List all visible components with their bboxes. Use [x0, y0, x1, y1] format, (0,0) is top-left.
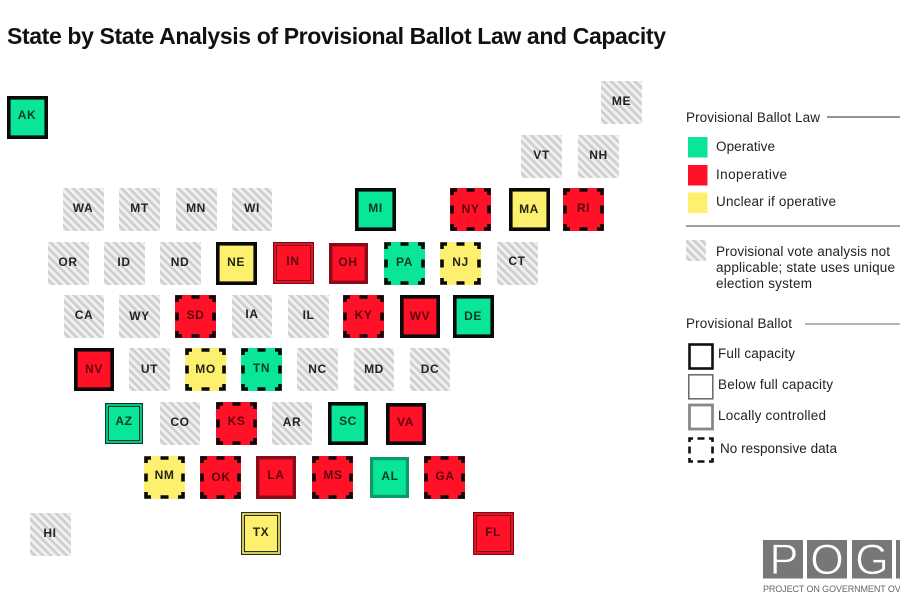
- legend: provisional ballot capacity: [686, 316, 900, 462]
- tile: SD: [175, 295, 216, 338]
- title: State by State Analysis of Provisional Ballot Law and Capacity: [7, 23, 666, 49]
- tile: CO: [160, 402, 200, 445]
- tile: OR: OR: [58, 255, 78, 269]
- tile: WI: WI: [244, 201, 260, 215]
- tile: PA: [384, 242, 425, 285]
- tile: HI: [30, 513, 71, 556]
- tile: ME: ME: [612, 94, 631, 108]
- tile: MS: MS: [323, 468, 343, 482]
- tile: OR: [48, 242, 89, 285]
- tile: PA: PA: [396, 255, 413, 269]
- tile: MD: MD: [364, 362, 384, 376]
- legend item: locally controlled: [690, 405, 826, 429]
- tile: IA: [232, 295, 272, 338]
- tile: WY: WY: [129, 309, 150, 323]
- legend item: locally controlled: Locally controlled: [718, 408, 826, 423]
- logo: POGO: P: [770, 536, 798, 584]
- tile: VT: [521, 135, 562, 178]
- tile: VA: [386, 403, 426, 445]
- legend item: not applicable: election system: [716, 276, 812, 291]
- legend item: not applicable: applicable; state uses unique: [716, 260, 895, 275]
- tile: NH: NH: [589, 148, 608, 162]
- tile: NJ: [440, 242, 481, 285]
- legend item: unclear: [688, 192, 836, 213]
- tile: AR: AR: [283, 415, 301, 429]
- tile: MA: [509, 188, 550, 231]
- tile: FL: FL: [485, 525, 501, 539]
- tile: NH: [578, 135, 619, 178]
- tile: MS: [312, 456, 353, 499]
- tile: CT: [497, 242, 538, 285]
- tile: NE: [216, 242, 257, 285]
- tile: VA: VA: [397, 415, 414, 429]
- tile: MN: [176, 188, 217, 231]
- tile: FL: [473, 512, 514, 555]
- tile: WA: [63, 188, 104, 231]
- tile: CA: [64, 295, 104, 338]
- tile: AL: [370, 457, 409, 498]
- tile: IN: [273, 242, 314, 284]
- tile: DC: [410, 348, 450, 391]
- logo: POGO: O: [810, 536, 844, 584]
- tile: KY: [343, 295, 384, 338]
- tile: UT: [129, 348, 170, 391]
- tile: KY: KY: [355, 308, 372, 322]
- tile: TN: [241, 348, 282, 391]
- legend item: full capacity: Full capacity: [718, 346, 795, 361]
- tile: NM: [144, 456, 185, 499]
- tile: SC: [328, 402, 368, 445]
- tile: MN: MN: [186, 201, 206, 215]
- tile: NM: NM: [155, 468, 174, 482]
- tile: MO: [185, 348, 226, 391]
- tile: DE: DE: [464, 309, 482, 323]
- tile: LA: LA: [267, 468, 285, 482]
- tile: CA: CA: [75, 308, 93, 322]
- legend heading: capacity: Provisional Ballot: [686, 316, 792, 331]
- tile: MA: MA: [519, 202, 539, 216]
- tile: MO: MO: [195, 362, 216, 376]
- tile: WA: WA: [73, 201, 93, 215]
- tile: TN: TN: [253, 361, 270, 375]
- tile: VT: VT: [533, 148, 550, 162]
- tile: NC: NC: [308, 362, 327, 376]
- legend item: not applicable: [686, 240, 895, 291]
- legend item: below full capacity: [689, 375, 833, 399]
- tile: MD: [354, 348, 394, 391]
- tile: UT: UT: [141, 362, 158, 376]
- legend item: unclear: Unclear if operative: [716, 194, 836, 209]
- tile: AL: AL: [381, 469, 399, 483]
- tile: NY: NY: [462, 202, 479, 216]
- tile: NV: [74, 348, 114, 391]
- tile: AK: AK: [18, 108, 36, 122]
- tile: TX: TX: [253, 525, 269, 539]
- tile: MT: [119, 188, 160, 231]
- legend item: inoperative: Inoperative: [716, 167, 787, 182]
- tile: DC: DC: [421, 362, 439, 376]
- tile grid map of states: [7, 81, 642, 556]
- tile: RI: [563, 188, 604, 231]
- tile: MT: MT: [130, 201, 149, 215]
- legend item: no responsive data: [690, 438, 837, 462]
- tile: IL: [288, 295, 329, 338]
- tile: OK: [200, 456, 241, 499]
- legend item: not applicable: Provisional vote analysis not: [716, 244, 890, 259]
- tile: LA: [256, 456, 296, 499]
- tile: WV: WV: [410, 309, 430, 323]
- tile: NJ: NJ: [452, 255, 469, 269]
- tile: OH: [329, 243, 368, 284]
- tile: AZ: AZ: [115, 414, 133, 428]
- tile: MI: [355, 188, 396, 231]
- tile: ME: [601, 81, 642, 124]
- legend item: operative: Operative: [716, 139, 775, 154]
- tile: AR: [272, 402, 312, 445]
- tile: ID: ID: [117, 255, 131, 269]
- tile: CO: CO: [170, 415, 190, 429]
- logo: POGO: G: [855, 536, 889, 584]
- tile: OK: OK: [211, 470, 231, 484]
- tile: RI: RI: [577, 201, 590, 215]
- tile: TX: [241, 512, 281, 555]
- tile: WI: [232, 188, 272, 231]
- tile: NE: NE: [227, 255, 245, 269]
- tile: AK: [7, 96, 48, 139]
- legend item: operative: [688, 137, 775, 158]
- tile: SD: SD: [187, 308, 204, 322]
- tile: HI: HI: [43, 526, 57, 540]
- tile: ND: ND: [171, 255, 189, 269]
- tile: AZ: [105, 403, 143, 444]
- tile: GA: GA: [435, 469, 455, 483]
- tile: NV: NV: [85, 362, 103, 376]
- tile: MI: MI: [368, 201, 383, 215]
- legend item: full capacity: [690, 344, 795, 368]
- tile: IN: IN: [286, 254, 300, 268]
- tile: KS: KS: [228, 414, 245, 428]
- tile: WY: [119, 295, 160, 338]
- tile: NC: [297, 348, 338, 391]
- legend item: below full capacity: Below full capacity: [718, 377, 833, 392]
- tile: CT: CT: [508, 254, 526, 268]
- tile: WV: [400, 295, 440, 338]
- legend: provisional ballot law: [686, 110, 900, 291]
- legend heading: law: Provisional Ballot Law: [686, 110, 820, 125]
- tile: GA: [424, 456, 465, 499]
- logo: POGO: [763, 536, 900, 594]
- tile: DE: [453, 295, 494, 338]
- tile: IA: IA: [245, 307, 259, 321]
- tile: OH: OH: [338, 255, 358, 269]
- tile: IL: IL: [303, 308, 314, 322]
- tile: KS: [216, 402, 257, 445]
- tile: ND: [160, 242, 201, 285]
- tile: ID: [104, 242, 145, 285]
- legend item: inoperative: [688, 165, 787, 186]
- tile: NY: [450, 188, 491, 231]
- tile: SC: SC: [339, 414, 357, 428]
- legend item: no responsive data: No responsive data: [720, 441, 837, 456]
